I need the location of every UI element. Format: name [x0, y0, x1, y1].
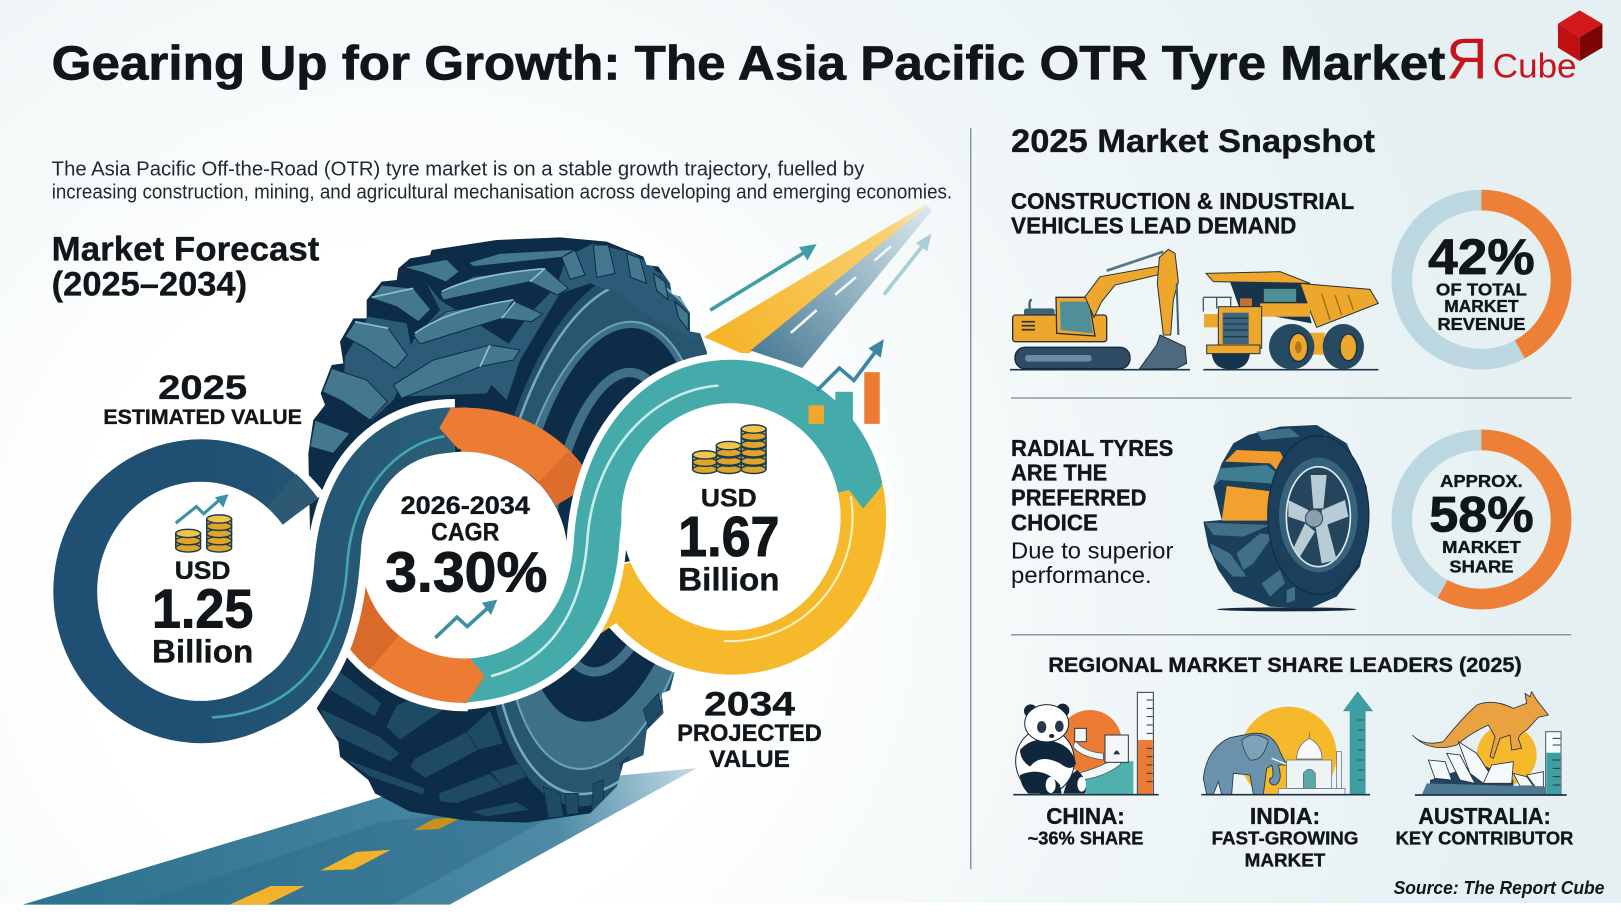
value: USD 1.67 billion: USD [701, 486, 757, 513]
upper tread lugs [310, 243, 697, 453]
donut: 42 percent: REVENUE [1438, 314, 1526, 334]
donut: 42 percent: 42% [1428, 229, 1535, 285]
icon: excavator [1010, 249, 1190, 370]
divider [1011, 397, 1571, 399]
icon: radial tyre cutaway [1203, 425, 1369, 611]
panel: regional market share leaders [1013, 654, 1574, 870]
value: 3.30% CAGR: CAGR [431, 520, 499, 547]
text: radial tyres preferred [1011, 435, 1174, 588]
value: 3.30% CAGR: 3.30% [385, 541, 547, 604]
text: radial tyres preferred: ARE THE [1011, 460, 1107, 486]
donut: 58 percent: SHARE [1449, 557, 1514, 577]
flow band: lower orange segment [346, 594, 485, 703]
road to horizon with arrows [704, 205, 932, 368]
region: India: INDIA: [1250, 803, 1320, 829]
value: USD 1.67 billion: Billion [678, 561, 779, 597]
flow band: upper orange segment [460, 430, 575, 494]
donut: 58 percent: APPROX. [1440, 471, 1523, 491]
region: India: MARKET [1245, 849, 1326, 870]
label: 2025 estimated value: ESTIMATED VALUE [103, 406, 302, 429]
value: 3.30% CAGR [385, 493, 547, 638]
panel: construction and industrial vehicles [1010, 188, 1561, 370]
donut: 58 percent: 58% [1429, 486, 1534, 542]
value: USD 1.25 billion: 1.25 [152, 578, 253, 640]
source note: Source: The Report Cube [1394, 877, 1604, 898]
label: 2025 estimated value [103, 369, 302, 429]
white circle: 2034 value [621, 403, 840, 631]
donut: 42 percent: OF TOTAL [1436, 280, 1527, 300]
donut: 42 percent: MARKET [1444, 296, 1519, 316]
logo: Report Cube: R [1446, 28, 1488, 92]
label: 2025 estimated value: 2025 [158, 369, 247, 407]
icon: kangaroo, opera house and gauge [1412, 692, 1567, 795]
icon: coins [693, 425, 766, 473]
logo: Report Cube: Cube [1493, 48, 1577, 86]
region: Australia: AUSTRALIA: [1418, 803, 1551, 829]
heading: market forecast: Market Forecast [52, 231, 319, 269]
region: Australia [1396, 692, 1574, 849]
value: USD 1.25 billion: Billion [152, 634, 253, 670]
label: 2034 projected value: PROJECTED [677, 720, 822, 747]
flow band: 2025 dark blue ring and S curve [76, 430, 455, 720]
value: USD 1.25 billion: USD [175, 558, 231, 585]
value: USD 1.67 billion: 1.67 [678, 506, 779, 569]
region: India [1201, 692, 1373, 870]
orange tip [439, 407, 467, 451]
donut: 42 percent [1402, 200, 1561, 359]
mini bar chart and arrow [808, 339, 884, 424]
intro text: increasing construction, mining, and agricultural mechanisation across developing and emerging economies. [52, 181, 952, 203]
white circle: 2025 value [97, 482, 304, 701]
divider [1011, 634, 1571, 636]
heading: regional: REGIONAL MARKET SHARE LEADERS (2025) [1048, 654, 1522, 677]
heading: construction [1011, 188, 1354, 239]
icon: elephant, Taj Mahal and arrow [1201, 692, 1373, 803]
heading: construction: VEHICLES LEAD DEMAND [1011, 213, 1296, 239]
text: radial tyres preferred: PREFERRED [1011, 485, 1146, 511]
large OTR tyre [308, 237, 708, 823]
vertical divider [970, 128, 972, 869]
text: radial tyres preferred: RADIAL TYRES [1011, 435, 1173, 461]
region: India: FAST-GROWING [1212, 828, 1358, 849]
white circle: CAGR [361, 452, 568, 659]
heading: 2025 market snapshot: 2025 Market Snapshot [1011, 123, 1375, 159]
heading: construction: CONSTRUCTION & INDUSTRIAL [1011, 188, 1354, 214]
road under tyre [23, 768, 697, 905]
lower tread lugs [320, 672, 662, 818]
icon: panda, wall and gauge [1013, 692, 1159, 795]
label: 2034 projected value [677, 685, 822, 773]
intro text: The Asia Pacific Off-the-Road (OTR) tyre market is on a stable growth trajectory, fuelled by [52, 159, 865, 181]
label: 2034 projected value: 2034 [704, 685, 795, 723]
donut: 58 percent [1402, 440, 1561, 599]
value: 3.30% CAGR: 2026-2034 [401, 493, 530, 520]
flow band: yellow 2034 ring [610, 488, 863, 652]
region: China: ~36% SHARE [1028, 828, 1143, 849]
value: USD 1.25 billion [152, 494, 253, 670]
region: Australia: KEY CONTRIBUTOR [1396, 828, 1574, 849]
region: China [1013, 692, 1159, 849]
value: USD 1.67 billion [678, 425, 779, 597]
intro text [52, 159, 952, 203]
icon: growth arrow [435, 600, 497, 638]
text: radial tyres preferred: performance. [1011, 562, 1152, 588]
donut: 58 percent: MARKET [1442, 537, 1521, 557]
text: radial tyres preferred: CHOICE [1011, 509, 1098, 535]
region: China: CHINA: [1046, 803, 1125, 829]
flow band: teal S curve [455, 383, 882, 680]
sidewall [495, 272, 708, 806]
icon: coins and arrow [176, 494, 232, 552]
heading: market forecast [52, 231, 319, 304]
panel: radial tyres [1011, 425, 1561, 611]
icon: dump truck [1203, 272, 1378, 370]
label: 2034 projected value: VALUE [709, 746, 790, 773]
text: radial tyres preferred: Due to superior [1011, 537, 1174, 563]
logo: Report Cube [1446, 10, 1602, 92]
heading: market forecast: (2025–2034) [52, 266, 247, 304]
title: Gearing Up for Growth: The Asia Pacific OTR Tyre Market [52, 37, 1445, 91]
